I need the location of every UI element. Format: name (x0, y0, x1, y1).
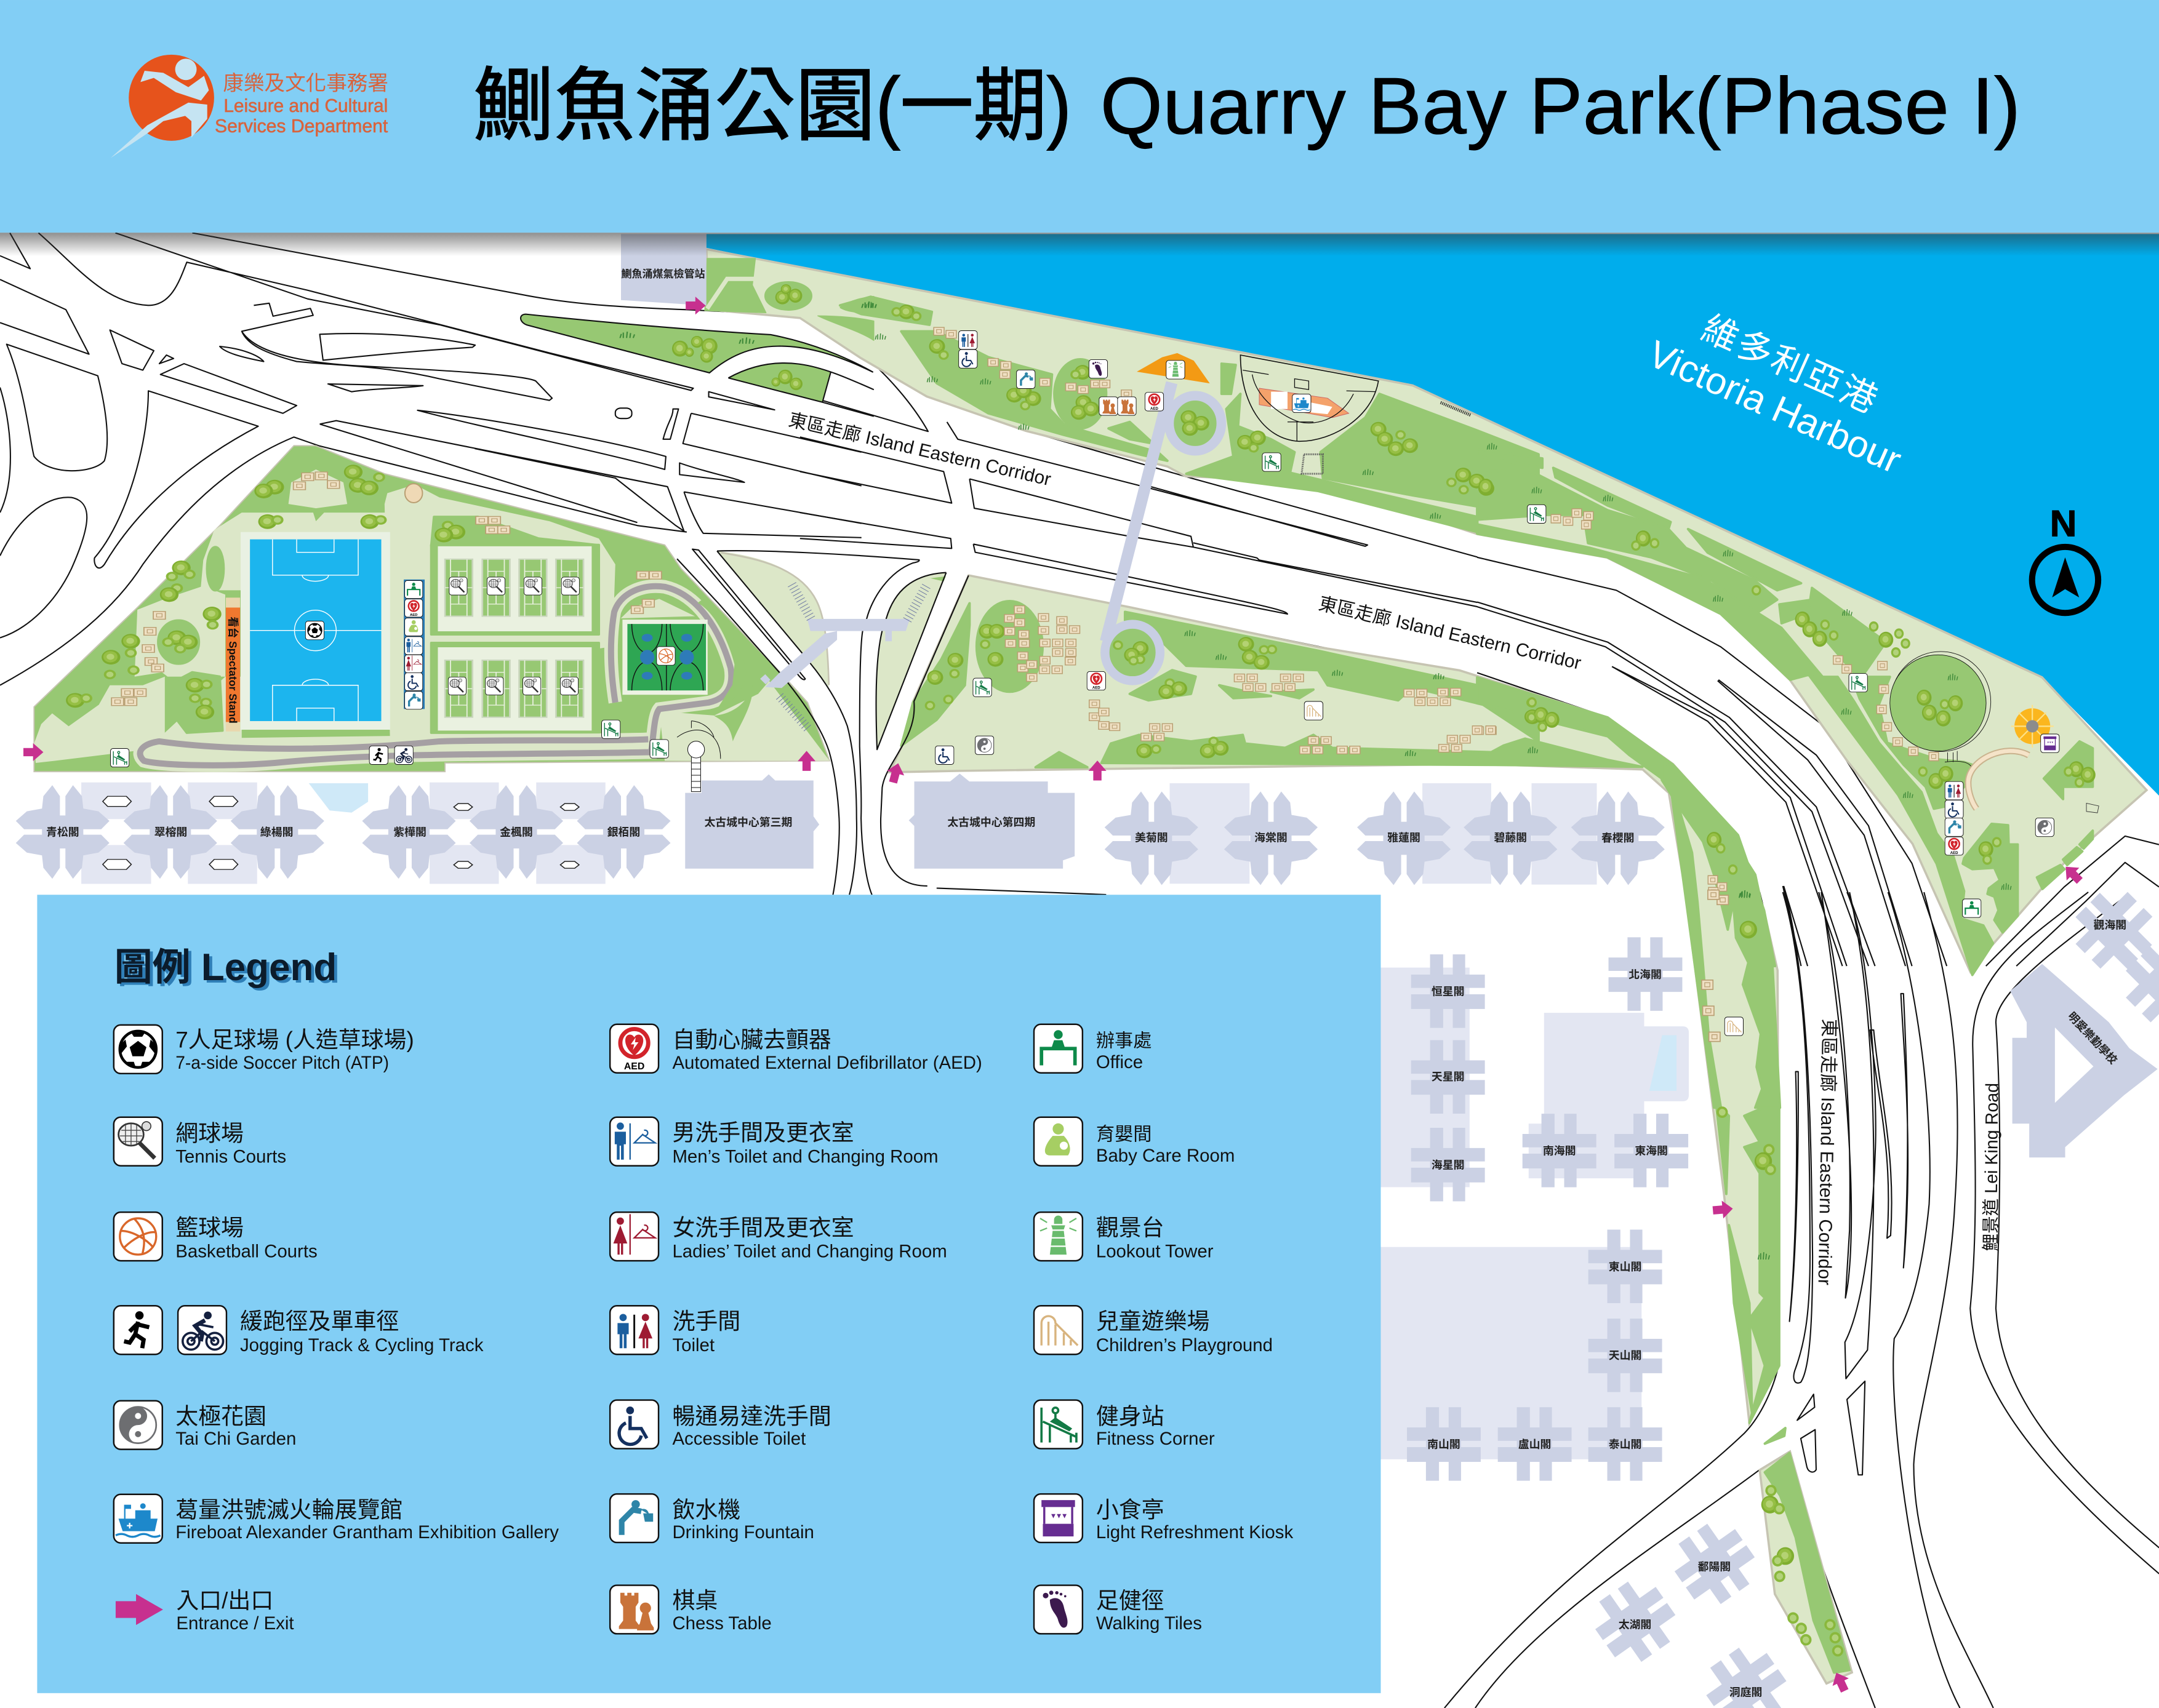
legend: tai chi: Tai Chi Garden (175, 1429, 296, 1449)
map icon: cycling track (395, 746, 413, 765)
map icons: fitness corners (111, 453, 1867, 767)
legend: entrance (116, 1588, 294, 1634)
building: 洞庭閣: 洞庭閣 (1729, 1685, 1762, 1698)
logo: LCSD: Leisure and Cultural (223, 96, 388, 116)
map icon: AED (405, 599, 423, 617)
building: 海棠閣 (1224, 791, 1318, 885)
map icon: fireboat gallery (1292, 394, 1311, 413)
legend: drinking fountain (610, 1494, 814, 1542)
legend: tai chi (114, 1401, 296, 1450)
title: 鰂魚涌公園 (474, 61, 876, 151)
building: 青松閣: 青松閣 (46, 826, 79, 838)
legend: men's toilet: 男洗手間及更衣室 (672, 1120, 854, 1146)
residential blocks: light courtyards east row (1170, 783, 1597, 885)
trees: central zone (866, 302, 1540, 758)
building: 明愛樂勤學校: 明愛樂勤學校 (2065, 1010, 2120, 1066)
legend: ladies' toilet: Ladies’ Toilet and Changing Room (672, 1242, 947, 1262)
building: 紫樺閣 (362, 785, 456, 879)
eastern strip lawns (1716, 1108, 1849, 1672)
building: 銀栢閣 (577, 785, 671, 879)
building: 碧藤閣: 碧藤閣 (1494, 832, 1527, 844)
legend: basketball: Basketball Courts (175, 1242, 318, 1262)
soccer pitch (241, 532, 390, 730)
title: Quarry Bay Park(Phase I) (1100, 61, 2021, 151)
north arrow (2032, 502, 2098, 613)
building: 太湖閣 (1584, 1570, 1686, 1673)
benches: eastern strip (1702, 890, 1728, 1042)
lawn wedge east of the sliver road (717, 551, 829, 687)
road network: eastern curve (1477, 557, 2159, 966)
legend: entrance: 入口/出口 (176, 1588, 273, 1613)
building: 美菊閣: 美菊閣 (1135, 831, 1168, 844)
panel: traffic island lawns (521, 284, 876, 417)
building: 海星閣: 海星閣 (1432, 1159, 1464, 1171)
residential blocks: west row backdrop (81, 783, 606, 884)
rotunda and stair (677, 721, 721, 792)
legend: tennis: 網球場 (175, 1121, 244, 1146)
legend: playground: Children’s Playground (1096, 1335, 1273, 1355)
logo: LCSD: 康樂及文化事務署 (223, 72, 388, 95)
lawns around the east plaza (1810, 677, 2093, 975)
label: corridor centre: 東區走廊 Island Eastern Corridor (1316, 594, 1583, 674)
map icon: office east (1963, 899, 1981, 917)
footbridge deck (760, 619, 910, 688)
legend: chess table (610, 1585, 772, 1634)
panel: northern waterfront park (705, 249, 2147, 975)
building: 綠楊閣 (231, 785, 324, 879)
footbridge stairs (780, 585, 926, 729)
junction road lines (677, 549, 969, 895)
building: 恒星閣: 恒星閣 (1432, 986, 1464, 998)
legend: soccer (114, 1025, 414, 1074)
panel: southern park and eastern strip (889, 575, 1852, 1683)
building: 翠榕閣 (124, 785, 217, 879)
legend: kiosk: Light Refreshment Kiosk (1096, 1522, 1293, 1542)
leaf lawn (714, 684, 753, 741)
building: 美菊閣 (1105, 791, 1198, 885)
map icon: lookout tower (1166, 361, 1185, 379)
legend: AED: 自動心臟去顫器 (672, 1028, 831, 1053)
eastern lawn circle and plaza (1890, 652, 2099, 813)
building: 東海閣 (1614, 1114, 1688, 1187)
trees: west zone (66, 465, 465, 719)
benches: east zone (1472, 509, 1939, 904)
building: 鰂魚涌煤氣檢管站: 鰂魚涌煤氣檢管站 (621, 268, 705, 280)
legend: jogging and cycling: 緩跑徑及單車徑 (240, 1309, 399, 1334)
map icon: drinking fountain (405, 692, 423, 709)
road network: central corridor (800, 316, 1477, 895)
map icon: accessible toilet north (959, 349, 977, 368)
map icon: baby care (405, 618, 423, 636)
spectator stand block (226, 597, 240, 732)
building: 天星閣: 天星閣 (1432, 1071, 1464, 1083)
entrance arrow south park (1089, 760, 1107, 781)
circular plaza (405, 484, 422, 503)
trees: eastern strip (1716, 890, 1843, 1656)
logo: LCSD: Services Department (215, 116, 388, 137)
legend: chess table: Chess Table (672, 1613, 772, 1634)
legend: tennis: Tennis Courts (175, 1146, 286, 1167)
panel: legend (37, 895, 1381, 1693)
legend: men's toilet: Men’s Toilet and Changing Room (672, 1146, 939, 1167)
building: 東山閣: 東山閣 (1609, 1261, 1641, 1273)
map icon: drinking fountain north (1017, 370, 1035, 389)
building: 雅蓮閣 (1357, 791, 1451, 885)
legend: baby care (1034, 1117, 1235, 1166)
map icon: jogging track (369, 746, 388, 765)
legend: chess table: 棋桌 (672, 1588, 718, 1613)
legend: toilet: 洗手間 (672, 1309, 740, 1334)
map icon: AED north (1145, 393, 1164, 411)
curve lawns (1477, 677, 1775, 966)
building: 南山閣: 南山閣 (1427, 1439, 1460, 1451)
tennis courts (438, 546, 591, 730)
building: 銀栢閣: 銀栢閣 (607, 826, 640, 838)
building: 天山閣: 天山閣 (1609, 1349, 1641, 1362)
building: 盧山閣 (1498, 1407, 1572, 1481)
legend: kiosk: 小食亭 (1096, 1498, 1164, 1523)
legend: office: Office (1096, 1052, 1143, 1072)
benches: west zone (111, 472, 662, 706)
map icon: walking tiles (1089, 359, 1108, 378)
map icon: office (405, 581, 423, 599)
ring ramps (1105, 396, 1221, 680)
legend: baby care: 育嬰間 (1096, 1124, 1152, 1145)
label: spectator stand: 看台 Spectator Stand (227, 617, 239, 724)
legend: soccer: 7-a-side Soccer Pitch (ATP) (175, 1053, 389, 1073)
building: 天山閣 (1588, 1319, 1662, 1392)
legend: walking tiles: Walking Tiles (1096, 1613, 1202, 1634)
legend: playground (1034, 1306, 1273, 1355)
north arrow: N (2050, 502, 2077, 544)
map icons: east plaza facilities (1945, 781, 1963, 855)
building: 南山閣 (1407, 1407, 1481, 1481)
building: 翠榕閣: 翠榕閣 (154, 825, 187, 838)
label: Victoria Harbour: 維多利亞港 (1696, 308, 1885, 421)
building: 春櫻閣 (1571, 791, 1665, 885)
building: 金楓閣 (470, 785, 563, 879)
lawns east of the fireboat (1477, 449, 1886, 680)
map icon: men's toilet (405, 637, 423, 655)
map icon: tai chi garden south (975, 736, 994, 754)
legend: office: 辦事處 (1096, 1030, 1152, 1051)
building: 春櫻閣: 春櫻閣 (1601, 832, 1635, 844)
building: 天星閣 (1411, 1040, 1485, 1114)
flower kiosk canopy (2011, 705, 2054, 748)
building: 南海閣 (1523, 1114, 1596, 1187)
strip lawns near the corridor curve (1662, 759, 1780, 1107)
map icon: tai chi garden east (2035, 818, 2054, 837)
map icon: toilet north (959, 330, 977, 349)
building: 鄱陽閣 (1663, 1512, 1766, 1615)
building: 北海閣 (1609, 937, 1682, 1011)
legend: entrance: Entrance / Exit (176, 1613, 294, 1634)
legend: jogging and cycling: Jogging Track & Cycling Track (240, 1335, 484, 1355)
legend: jogging and cycling (114, 1306, 484, 1355)
legend: fitness corner: Fitness Corner (1096, 1429, 1215, 1449)
building: 太古城中心第三期 (685, 774, 819, 869)
basketball courts (622, 620, 708, 695)
legend: toilet (610, 1306, 740, 1355)
building: 太古城中心第三期: 太古城中心第三期 (704, 815, 792, 828)
label: Victoria Harbour: Victoria Harbour (1642, 332, 1907, 481)
lawns between paths (158, 517, 599, 733)
building: 鄱陽閣: 鄱陽閣 (1698, 1561, 1731, 1573)
legend: ladies' toilet: 女洗手間及更衣室 (672, 1215, 854, 1240)
building: 觀海閣: 觀海閣 (2094, 919, 2126, 931)
building: 盧山閣: 盧山閣 (1518, 1439, 1551, 1451)
building: 觀海閣 (2062, 879, 2159, 1036)
legend: tai chi: 太極花園 (175, 1403, 266, 1429)
building: 海星閣 (1411, 1128, 1485, 1201)
building: 金楓閣: 金楓閣 (500, 825, 533, 838)
wedge outer edge (721, 553, 829, 685)
entrance arrow centre (798, 751, 815, 771)
legend: accessible toilet: 暢通易達洗手間 (672, 1403, 831, 1429)
legend: kiosk (1034, 1494, 1293, 1542)
legend: drinking fountain: 飲水機 (672, 1498, 740, 1523)
lookout tower base (1137, 353, 1210, 383)
label: corridor west: 東區走廊 Island Eastern Corridor (787, 410, 1053, 490)
legend: AED: Automated External Defibrillator (AED) (672, 1053, 982, 1073)
legend: lookout tower (1034, 1212, 1214, 1262)
legend: walking tiles (1034, 1585, 1202, 1634)
footbridge junction: lawns, roads and stairs (677, 549, 969, 895)
benches: central zone (934, 327, 1496, 754)
legend: drinking fountain: Drinking Fountain (672, 1522, 814, 1542)
legend: lookout tower: 觀景台 (1096, 1215, 1164, 1240)
legend: fireboat (114, 1494, 559, 1543)
residential blocks: light courtyards east side (1380, 968, 1689, 1459)
legend: lookout tower: Lookout Tower (1096, 1242, 1214, 1262)
fireboat gallery (1240, 355, 1471, 474)
road network: south-east junction and Lei King Road (1444, 892, 2159, 1708)
facilities sidebar (404, 580, 425, 709)
building: 太湖閣: 太湖閣 (1619, 1619, 1651, 1631)
legend: soccer: 7人足球場 (人造草球場) (175, 1028, 414, 1053)
building: 雅蓮閣: 雅蓮閣 (1387, 832, 1420, 844)
map icon: accessible toilet south (935, 746, 954, 765)
map icon: ladies' toilet (405, 655, 423, 673)
legend: toilet: Toilet (672, 1335, 715, 1355)
legend: fireboat: Fireboat Alexander Grantham Exhibition Gallery (175, 1522, 559, 1542)
title: (一期) (876, 61, 1071, 151)
label: corridor east: 東區走廊 Island Eastern Corridor (1814, 1018, 1839, 1285)
road network: west interchange (0, 233, 862, 685)
building: 太古城中心第四期: 太古城中心第四期 (947, 815, 1035, 828)
legend: accessible toilet: Accessible Toilet (672, 1429, 806, 1449)
header shadow (0, 233, 2159, 256)
panel: header band (0, 0, 2159, 233)
legend heading: 圖例 Legend (114, 946, 337, 989)
building: 鰂魚涌煤氣檢管站 (621, 234, 707, 306)
map icon: soccer pitch (305, 621, 324, 640)
legend: basketball: 籃球場 (175, 1215, 244, 1240)
title (474, 61, 2021, 151)
lawn wedge beside the road fork (876, 573, 946, 749)
light paths and plazas (34, 469, 830, 763)
map icons: chess tables (1099, 397, 1136, 415)
building: 太古城中心第四期 (909, 773, 1075, 869)
west end lawn and path (705, 258, 874, 340)
legend: tennis (114, 1117, 286, 1167)
building: 東山閣 (1588, 1230, 1662, 1303)
legend: accessible toilet (610, 1400, 831, 1449)
map icon: kiosk (2041, 734, 2059, 752)
building: 恒星閣 (1411, 954, 1485, 1028)
building: 明愛樂勤學校 (2010, 964, 2158, 1157)
legend: fitness corner (1034, 1400, 1215, 1449)
water: Victoria Harbour (707, 234, 2159, 796)
building: 泰山閣: 泰山閣 (1609, 1439, 1641, 1451)
building: 北海閣: 北海閣 (1628, 968, 1662, 981)
legend heading: 圖例 Legend (118, 949, 340, 991)
jogging and cycling track (140, 586, 731, 765)
map icon: AED south (1087, 671, 1105, 690)
map icon: basketball (657, 647, 675, 665)
entrance arrow south (1828, 1669, 1853, 1694)
legend: fitness corner: 健身站 (1096, 1403, 1164, 1429)
panel: western sports ground (34, 445, 830, 772)
entrance arrow north-west (686, 297, 706, 314)
legend: baby care: Baby Care Room (1096, 1146, 1235, 1166)
entrance arrow east (2059, 861, 2086, 887)
legend: men's toilet (610, 1117, 939, 1167)
jogging and cycling track border (140, 586, 731, 765)
building: 東海閣: 東海閣 (1635, 1145, 1668, 1157)
trees: east zone (1478, 443, 2096, 937)
legend: office (1034, 1024, 1152, 1073)
map icons: tennis courts (448, 577, 579, 695)
building: 紫樺閣: 紫樺閣 (393, 826, 427, 838)
legend: basketball (114, 1212, 318, 1262)
building: 綠楊閣: 綠楊閣 (260, 826, 293, 838)
entrance arrow west (23, 743, 43, 761)
lawn band around the track (697, 598, 746, 708)
building: 洞庭閣 (1694, 1637, 1797, 1708)
building: 泰山閣 (1588, 1407, 1662, 1481)
building: 青松閣 (16, 785, 110, 879)
building: 海棠閣: 海棠閣 (1254, 832, 1288, 844)
lawn sliver in the wedge (931, 577, 946, 581)
legend: walking tiles: 足健徑 (1096, 1588, 1164, 1613)
legend: playground: 兒童遊樂場 (1096, 1309, 1209, 1334)
entrance arrow road (884, 761, 907, 785)
building: 碧藤閣 (1464, 791, 1557, 885)
logo: LCSD (111, 55, 388, 158)
label: Lei King Road: 鯉景道 Lei King Road (1981, 1083, 2002, 1251)
lawns west of the fireboat (840, 297, 1539, 532)
legend: ladies' toilet (610, 1212, 947, 1262)
map icons: children's playgrounds (1304, 701, 1744, 1036)
southern park lawns (901, 601, 1539, 767)
legend: fireboat: 葛量洪號滅火輪展覽館 (175, 1498, 403, 1523)
legend: AED (610, 1024, 982, 1073)
entrance arrow strip (1712, 1200, 1734, 1219)
building: 南海閣: 南海閣 (1543, 1145, 1576, 1157)
map icon: accessible toilet (405, 672, 423, 691)
pedestrian bridge over corridor (1106, 383, 1172, 642)
